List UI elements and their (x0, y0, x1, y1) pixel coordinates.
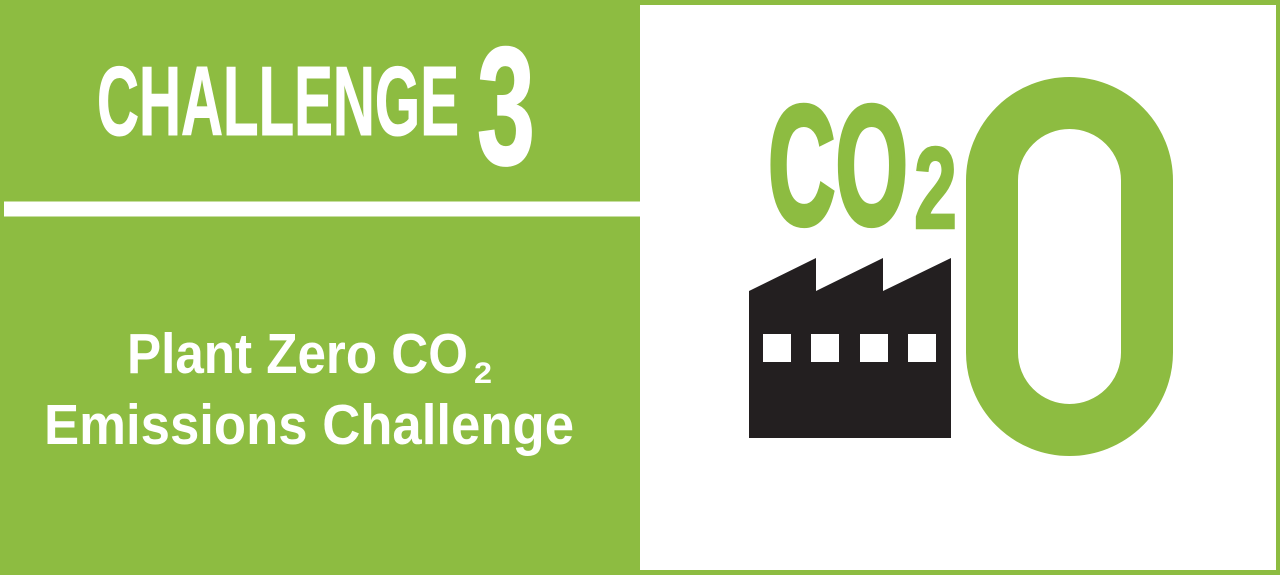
icon: CO2 zero factory (749, 71, 1147, 438)
icon: factory (749, 258, 951, 438)
icon: large zero (992, 103, 1147, 430)
text block: challenge name: 2 (474, 357, 492, 390)
text block: challenge name: Emissions Challenge (44, 393, 574, 457)
text block: challenge name (44, 322, 574, 457)
icon text: CO2: CO (768, 71, 908, 261)
panel: white icon panel (640, 5, 1276, 570)
heading: CHALLENGE 3 (97, 12, 535, 200)
divider bar (4, 202, 640, 216)
icon text: CO2: 2 (914, 123, 957, 253)
heading: CHALLENGE 3: 3 (477, 12, 535, 200)
heading: CHALLENGE 3: CHALLENGE (97, 46, 459, 156)
text block: challenge name: Plant Zero CO (127, 322, 468, 386)
